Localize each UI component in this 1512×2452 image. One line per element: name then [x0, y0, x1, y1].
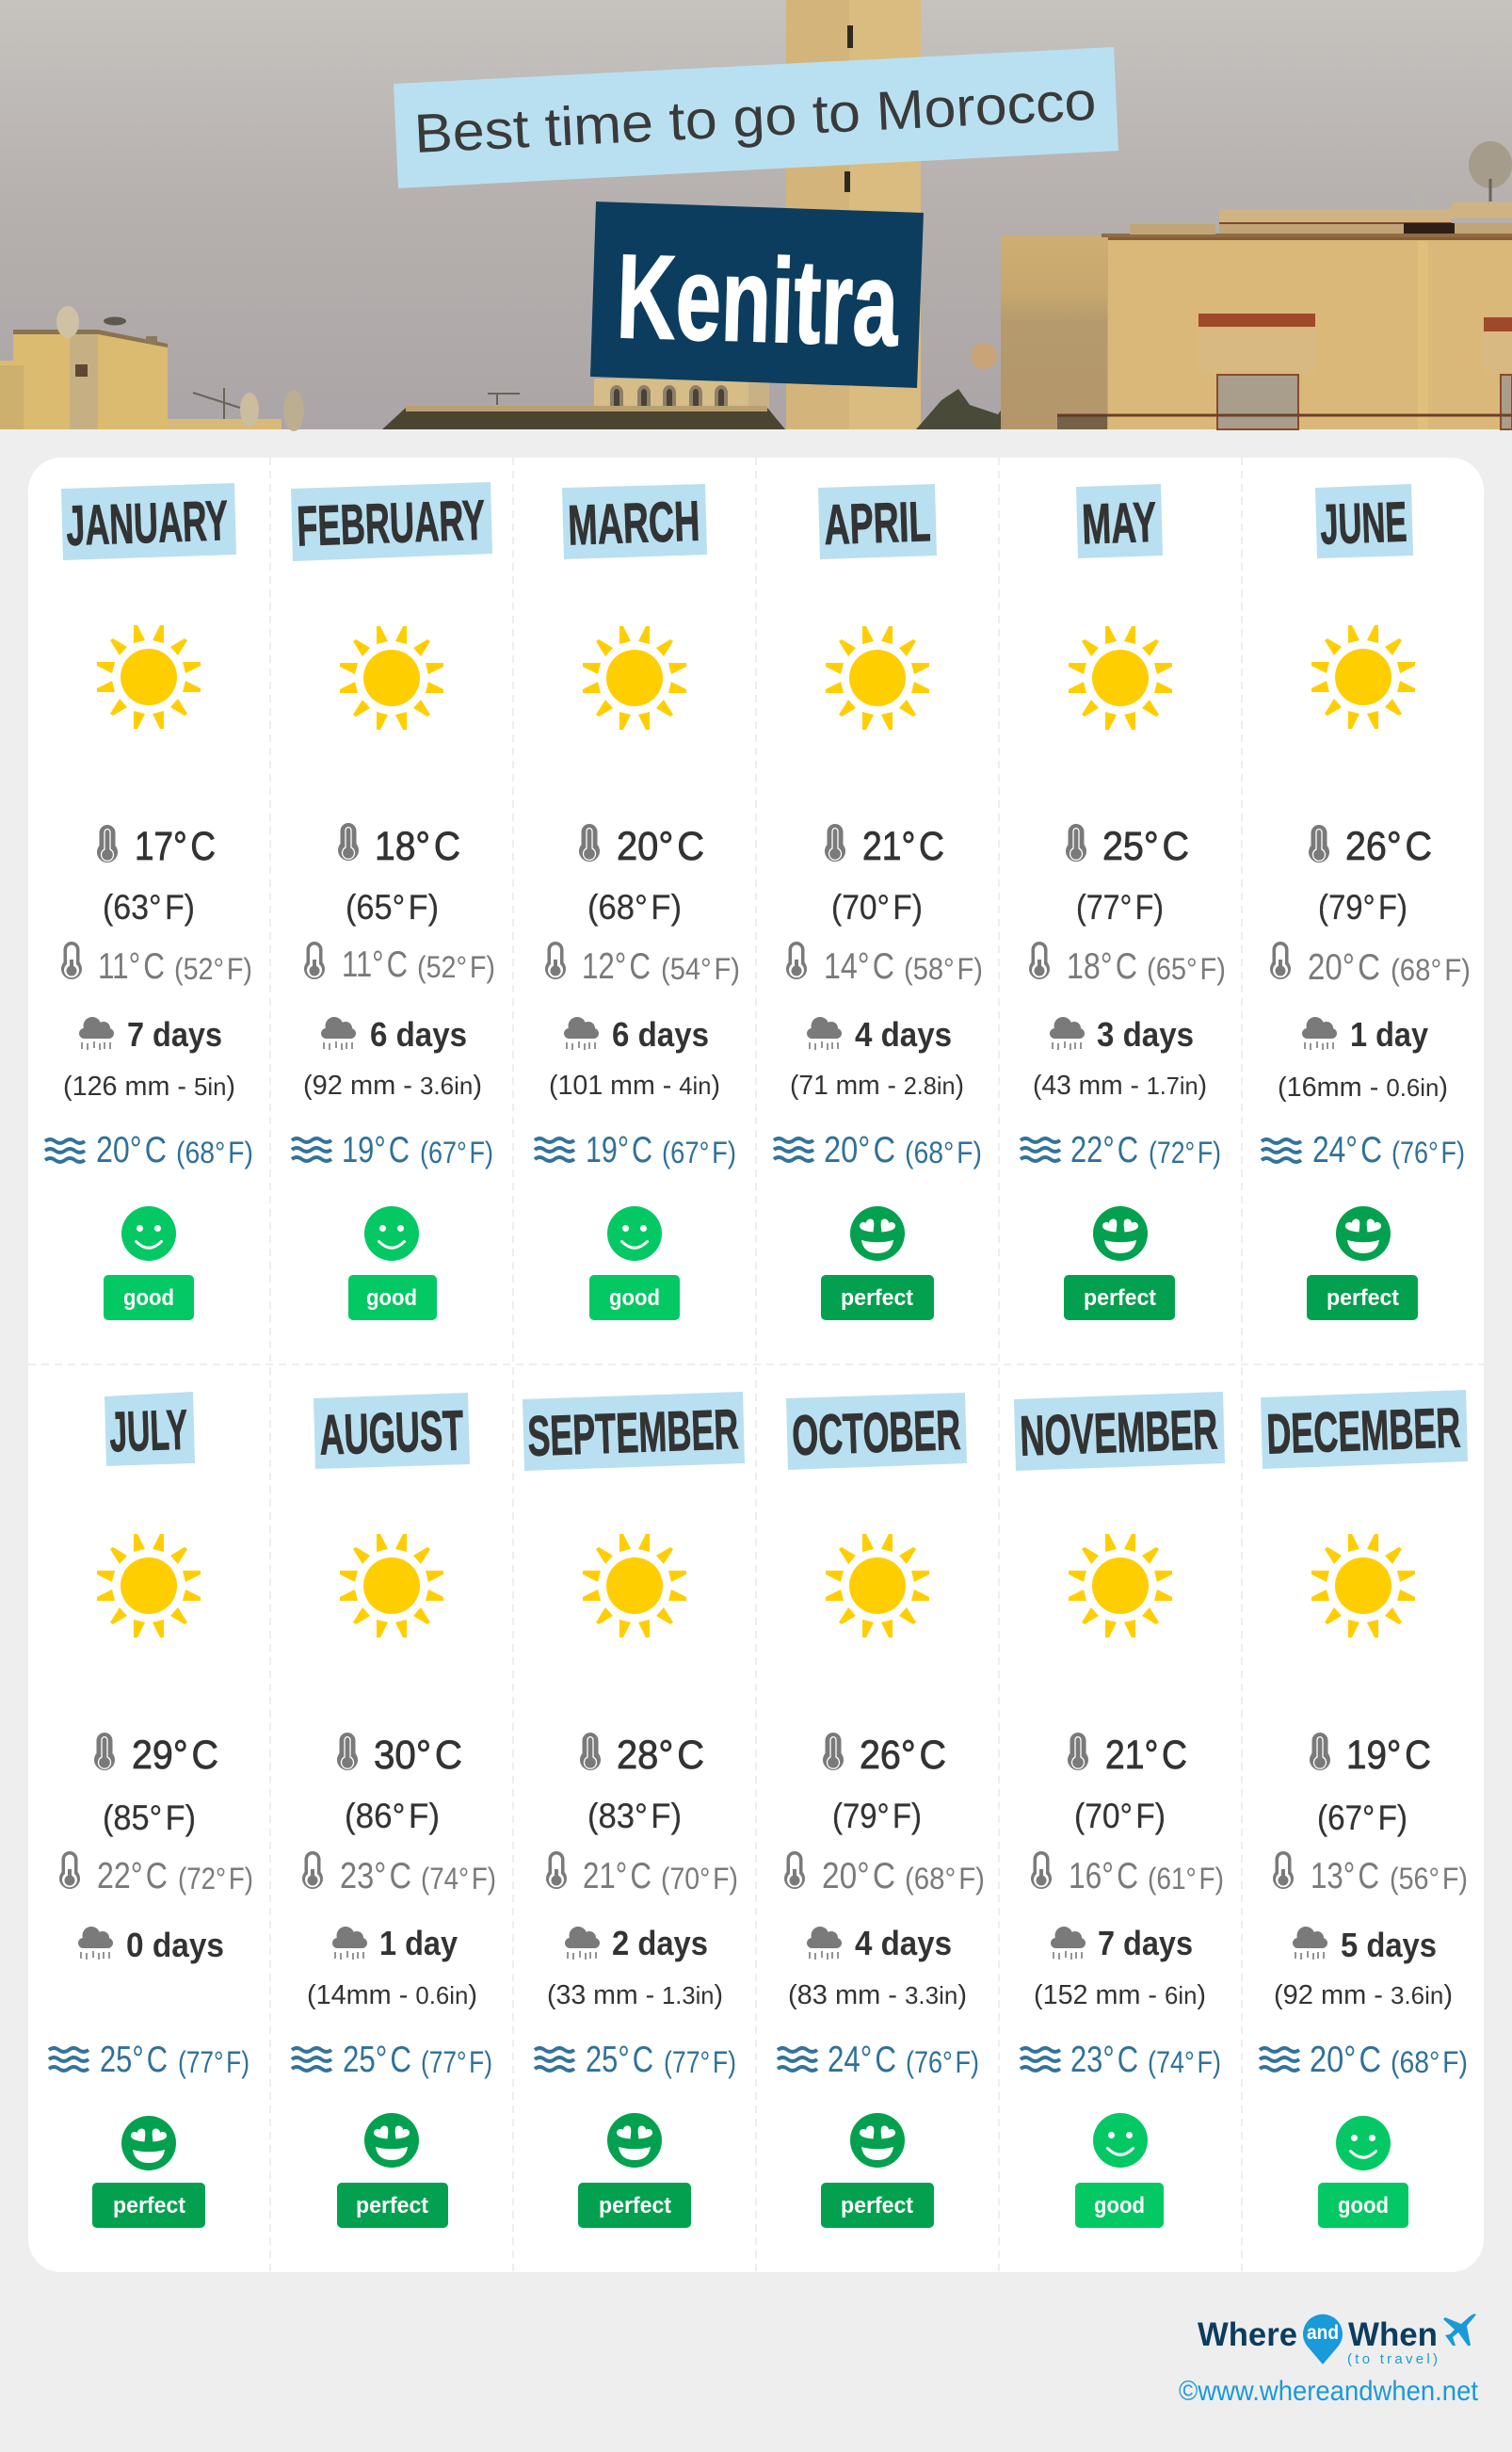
icon: perfect rating — [850, 1206, 905, 1261]
sea temperature — [45, 1130, 253, 1170]
sea temperature — [1021, 2040, 1221, 2080]
rainfall: (83 mm - 3.3in) — [788, 1980, 967, 2010]
max temperature fahrenheit: (79° F) — [832, 1797, 922, 1835]
sea temperature — [535, 2040, 736, 2080]
month heading: May — [1076, 484, 1163, 558]
rainy days — [321, 1015, 467, 1054]
icon: sun — [340, 1534, 443, 1637]
sea temperature: (68° F) — [176, 1136, 253, 1170]
min temperature — [1270, 942, 1471, 988]
max temperature fahrenheit: (86° F) — [345, 1797, 440, 1835]
min temperature — [304, 942, 495, 985]
min temperature: 23° C — [340, 1856, 411, 1896]
panel: April — [774, 484, 983, 1320]
panel: March — [535, 484, 740, 1320]
max temperature fahrenheit: (70° F) — [831, 888, 923, 927]
logo: Where and When: and — [1307, 2322, 1339, 2344]
max temperature fahrenheit: (79° F) — [1318, 888, 1407, 927]
max temperature — [338, 823, 460, 869]
min temperature: 22° C — [97, 1856, 168, 1896]
min temperature: (74° F) — [421, 1862, 496, 1895]
rainy days — [565, 1924, 708, 1962]
rating badge: perfect: perfect — [599, 2193, 671, 2218]
min temperature: 11° C — [98, 946, 165, 987]
rainfall: (92 mm - 3.6in) — [1274, 1980, 1453, 2010]
sea temperature: 23° C — [1070, 2040, 1138, 2080]
sea temperature: (77° F) — [421, 2045, 492, 2079]
month heading: November — [1014, 1392, 1225, 1471]
month heading: August: AUGUST — [318, 1398, 464, 1467]
month heading: May: MAY — [1081, 491, 1157, 556]
rating badge: good: good — [1338, 2193, 1389, 2218]
rainfall: (101 mm - 4in) — [549, 1071, 720, 1101]
rainy days: 2 days — [612, 1924, 708, 1962]
sea temperature: (72° F) — [1149, 1136, 1221, 1170]
sea temperature: 20° C — [824, 1130, 895, 1170]
logo: Where and When: Where — [1198, 2316, 1297, 2353]
rainy days — [807, 1924, 952, 1962]
max temperature — [580, 1733, 704, 1778]
max temperature: 20° C — [617, 824, 704, 869]
max temperature: 21° C — [1105, 1733, 1187, 1778]
rating badge: good: good — [123, 1285, 174, 1311]
min temperature — [1029, 942, 1226, 987]
max temperature: 28° C — [617, 1733, 704, 1778]
sea temperature — [292, 2040, 492, 2080]
sea temperature: 24° C — [828, 2040, 896, 2080]
month heading: February — [291, 482, 492, 561]
min temperature: (58° F) — [904, 952, 983, 986]
rainy days: 4 days — [855, 1015, 952, 1054]
sea temperature: (76° F) — [1391, 1136, 1465, 1170]
sea temperature — [49, 2040, 249, 2080]
rainy days: 7 days — [127, 1015, 222, 1054]
min temperature: 20° C — [822, 1856, 895, 1896]
icon: perfect rating — [364, 2113, 419, 2168]
max temperature — [1310, 1733, 1431, 1778]
month heading: February: FEBRUARY — [296, 489, 486, 557]
min temperature: (52° F) — [174, 952, 252, 986]
city name banner: Kenitra — [615, 229, 901, 371]
month heading: October: OCTOBER — [791, 1398, 961, 1467]
min temperature — [1031, 1851, 1224, 1896]
rainy days — [1293, 1926, 1437, 1964]
min temperature: (72° F) — [178, 1862, 253, 1895]
max temperature — [823, 1733, 946, 1778]
icon: sun — [1311, 1534, 1415, 1637]
min temperature: (52° F) — [417, 950, 495, 984]
sea temperature — [1262, 1130, 1465, 1170]
month heading: July — [105, 1392, 195, 1466]
month heading: January — [61, 483, 236, 560]
rating badge: good — [1318, 2183, 1408, 2228]
max temperature fahrenheit: (70° F) — [1074, 1797, 1166, 1835]
sea temperature: (74° F) — [1148, 2045, 1221, 2079]
rating badge: perfect: perfect — [113, 2193, 185, 2218]
min temperature: 16° C — [1069, 1856, 1138, 1896]
max temperature — [94, 1733, 218, 1778]
sea temperature: (76° F) — [906, 2045, 979, 2079]
title banner: Best time to go to Morocco — [412, 71, 1098, 165]
rainfall: (152 mm - 6in) — [1034, 1980, 1206, 2010]
rating badge: good: good — [1094, 2193, 1145, 2218]
icon: sun — [340, 626, 443, 730]
sea temperature: (67° F) — [662, 1136, 736, 1170]
max temperature: 25° C — [1102, 824, 1189, 869]
rainy days: 6 days — [370, 1015, 467, 1054]
icon: sun — [1069, 1534, 1172, 1637]
min temperature: (56° F) — [1390, 1862, 1468, 1895]
panel: December — [1260, 1390, 1468, 2228]
max temperature fahrenheit: (85° F) — [103, 1799, 196, 1837]
month heading: June — [1315, 484, 1413, 558]
panel: June — [1262, 484, 1471, 1320]
min temperature: (54° F) — [661, 952, 740, 986]
icon: perfect rating — [1336, 1206, 1391, 1261]
min temperature — [302, 1851, 496, 1896]
month heading: November: NOVEMBER — [1019, 1397, 1218, 1468]
sea temperature: 24° C — [1312, 1130, 1382, 1170]
rating badge: perfect — [1064, 1275, 1175, 1320]
icon: perfect rating — [121, 2116, 176, 2170]
month heading: April: APRIL — [823, 490, 931, 557]
rating badge: good — [104, 1275, 194, 1320]
sea temperature: 25° C — [343, 2040, 411, 2080]
rating badge: perfect — [92, 2183, 205, 2228]
panel: January — [45, 483, 253, 1320]
sea temperature: (77° F) — [664, 2045, 736, 2079]
rating badge: perfect — [821, 2183, 934, 2228]
icon: perfect rating — [607, 2113, 662, 2168]
rainy days — [807, 1015, 952, 1054]
max temperature: 17° C — [135, 824, 216, 869]
icon: sun — [97, 1534, 201, 1637]
rainfall: (126 mm - 5in) — [63, 1072, 235, 1102]
icon: good rating — [1093, 2113, 1148, 2168]
min temperature: (61° F) — [1148, 1862, 1224, 1895]
sea temperature — [1021, 1130, 1221, 1170]
rating badge: perfect: perfect — [841, 2193, 913, 2218]
rainy days: 4 days — [855, 1924, 952, 1962]
rating badge: good — [589, 1275, 680, 1320]
max temperature — [1068, 1733, 1187, 1778]
sea temperature: 19° C — [342, 1130, 410, 1170]
panel: September — [523, 1392, 745, 2228]
icon: sun — [97, 625, 201, 729]
rainy days: 6 days — [612, 1015, 709, 1054]
icon: sun — [583, 1534, 686, 1637]
panel: October — [778, 1393, 985, 2228]
rainfall: (43 mm - 1.7in) — [1033, 1071, 1207, 1101]
min temperature: 20° C — [1308, 947, 1380, 988]
min temperature: (70° F) — [661, 1862, 738, 1895]
icon: good rating — [121, 1206, 176, 1261]
icon: sun — [826, 626, 929, 730]
max temperature — [1066, 824, 1189, 869]
month heading: October — [786, 1393, 967, 1470]
min temperature: 13° C — [1311, 1856, 1379, 1896]
rating badge: perfect: perfect — [1327, 1285, 1399, 1311]
icon: perfect rating — [850, 2113, 905, 2168]
month heading: September — [523, 1392, 745, 1471]
rating badge: perfect: perfect — [1084, 1285, 1156, 1311]
rating badge: perfect: perfect — [841, 1285, 913, 1311]
max temperature: 18° C — [375, 824, 460, 869]
rainy days — [79, 1015, 222, 1054]
sea temperature — [535, 1130, 736, 1170]
max temperature: 19° C — [1346, 1733, 1431, 1778]
sea temperature — [1260, 2040, 1468, 2080]
sea temperature — [778, 2040, 979, 2080]
max temperature fahrenheit: (83° F) — [587, 1797, 682, 1835]
rainfall: (71 mm - 2.8in) — [790, 1071, 964, 1101]
rating badge: good: good — [609, 1285, 660, 1311]
rainy days: 7 days — [1098, 1924, 1193, 1962]
rainfall: (14mm - 0.6in) — [307, 1980, 477, 2010]
icon: sun — [583, 626, 686, 730]
rating badge: good — [348, 1275, 437, 1320]
header photo: Kenitra skyline — [0, 0, 1512, 431]
max temperature: 30° C — [374, 1733, 462, 1778]
min temperature — [784, 1851, 985, 1896]
sea temperature: (77° F) — [178, 2045, 249, 2079]
title banner — [394, 47, 1118, 188]
rainfall: (92 mm - 3.6in) — [303, 1071, 482, 1101]
rainy days — [78, 1926, 224, 1964]
climate card — [28, 458, 1484, 2272]
rainy days: 0 days — [126, 1926, 224, 1964]
min temperature: 11° C — [342, 944, 408, 985]
rating badge: perfect — [821, 1275, 934, 1320]
month heading: August — [314, 1393, 470, 1469]
min temperature — [546, 1851, 738, 1896]
min temperature: (68° F) — [905, 1862, 985, 1895]
min temperature — [61, 942, 252, 987]
icon: sun — [826, 1534, 929, 1637]
city name banner — [590, 202, 924, 388]
icon: good rating — [364, 1206, 419, 1261]
max temperature: 26° C — [1345, 824, 1432, 869]
panel: July — [49, 1392, 253, 2228]
rainfall: (16mm - 0.6in) — [1278, 1073, 1448, 1103]
rainfall: (33 mm - 1.3in) — [547, 1980, 723, 2010]
min temperature: 21° C — [583, 1856, 651, 1896]
max temperature — [97, 824, 216, 869]
website credit: ©www.whereandwhen.net — [1179, 2376, 1479, 2407]
max temperature — [337, 1733, 462, 1778]
min temperature: 14° C — [824, 946, 894, 987]
icon: good rating — [1336, 2116, 1391, 2170]
rating badge: perfect — [578, 2183, 691, 2228]
month heading: April — [818, 484, 937, 559]
rainy days: 5 days — [1341, 1926, 1437, 1964]
month heading: January: JANUARY — [65, 489, 229, 557]
rating badge: good: good — [366, 1285, 417, 1311]
max temperature fahrenheit: (68° F) — [587, 888, 682, 927]
rating badge: perfect: perfect — [356, 2193, 428, 2218]
panel: May — [1021, 484, 1226, 1320]
rainy days: 3 days — [1097, 1015, 1194, 1054]
max temperature fahrenheit: (67° F) — [1317, 1799, 1407, 1837]
max temperature: 29° C — [132, 1733, 218, 1778]
rating badge: good — [1075, 2183, 1164, 2228]
rating badge: perfect — [337, 2183, 448, 2228]
sea temperature: 20° C — [96, 1130, 167, 1170]
rating badge: perfect — [1307, 1275, 1418, 1320]
month heading: July: JULY — [108, 1398, 188, 1463]
rainy days: 1 day — [1350, 1015, 1428, 1054]
sea temperature: (68° F) — [1391, 2045, 1468, 2079]
rainy days — [1050, 1015, 1194, 1054]
month heading: March: MARCH — [567, 490, 700, 557]
sea temperature: (67° F) — [420, 1136, 493, 1170]
sea temperature — [774, 1130, 982, 1170]
panel: February — [291, 482, 495, 1320]
max temperature fahrenheit: (77° F) — [1076, 888, 1164, 927]
rainy days: 1 day — [379, 1924, 458, 1962]
max temperature fahrenheit: (63° F) — [103, 888, 195, 927]
icon: sun — [1311, 625, 1415, 729]
max temperature fahrenheit: (65° F) — [346, 888, 439, 927]
min temperature: (68° F) — [1391, 953, 1471, 987]
max temperature: 26° C — [860, 1733, 946, 1778]
logo: Where and When: When — [1348, 2316, 1438, 2353]
min temperature: 12° C — [582, 946, 651, 987]
month heading: March — [562, 484, 707, 559]
logo: Where and When: (to travel) — [1347, 2351, 1438, 2367]
month heading: September: SEPTEMBER — [526, 1397, 739, 1468]
min temperature — [545, 942, 740, 987]
icon: good rating — [607, 1206, 662, 1261]
rainy days — [564, 1015, 709, 1054]
sea temperature: 25° C — [100, 2040, 168, 2080]
min temperature — [59, 1851, 253, 1896]
sea temperature: (68° F) — [905, 1136, 982, 1170]
month heading: June: JUNE — [1319, 490, 1407, 557]
rainy days — [1051, 1924, 1193, 1962]
min temperature — [1273, 1851, 1468, 1896]
rainy days — [332, 1924, 458, 1962]
min temperature — [786, 942, 983, 987]
panel: August — [292, 1393, 496, 2228]
sea temperature: 25° C — [586, 2040, 653, 2080]
icon: sun — [1069, 626, 1172, 730]
sea temperature: 19° C — [586, 1130, 652, 1170]
rainy days — [1302, 1015, 1428, 1054]
min temperature: (65° F) — [1147, 952, 1226, 986]
logo: Where and When — [1198, 2314, 1476, 2367]
max temperature: 21° C — [862, 824, 944, 869]
max temperature — [825, 824, 944, 869]
max temperature — [579, 824, 704, 869]
sea temperature — [292, 1130, 493, 1170]
sea temperature: 20° C — [1310, 2040, 1381, 2080]
min temperature: 18° C — [1067, 946, 1137, 987]
icon: perfect rating — [1093, 1206, 1148, 1261]
max temperature — [1309, 824, 1432, 869]
sea temperature: 22° C — [1070, 1130, 1138, 1170]
panel: November — [1014, 1392, 1225, 2228]
